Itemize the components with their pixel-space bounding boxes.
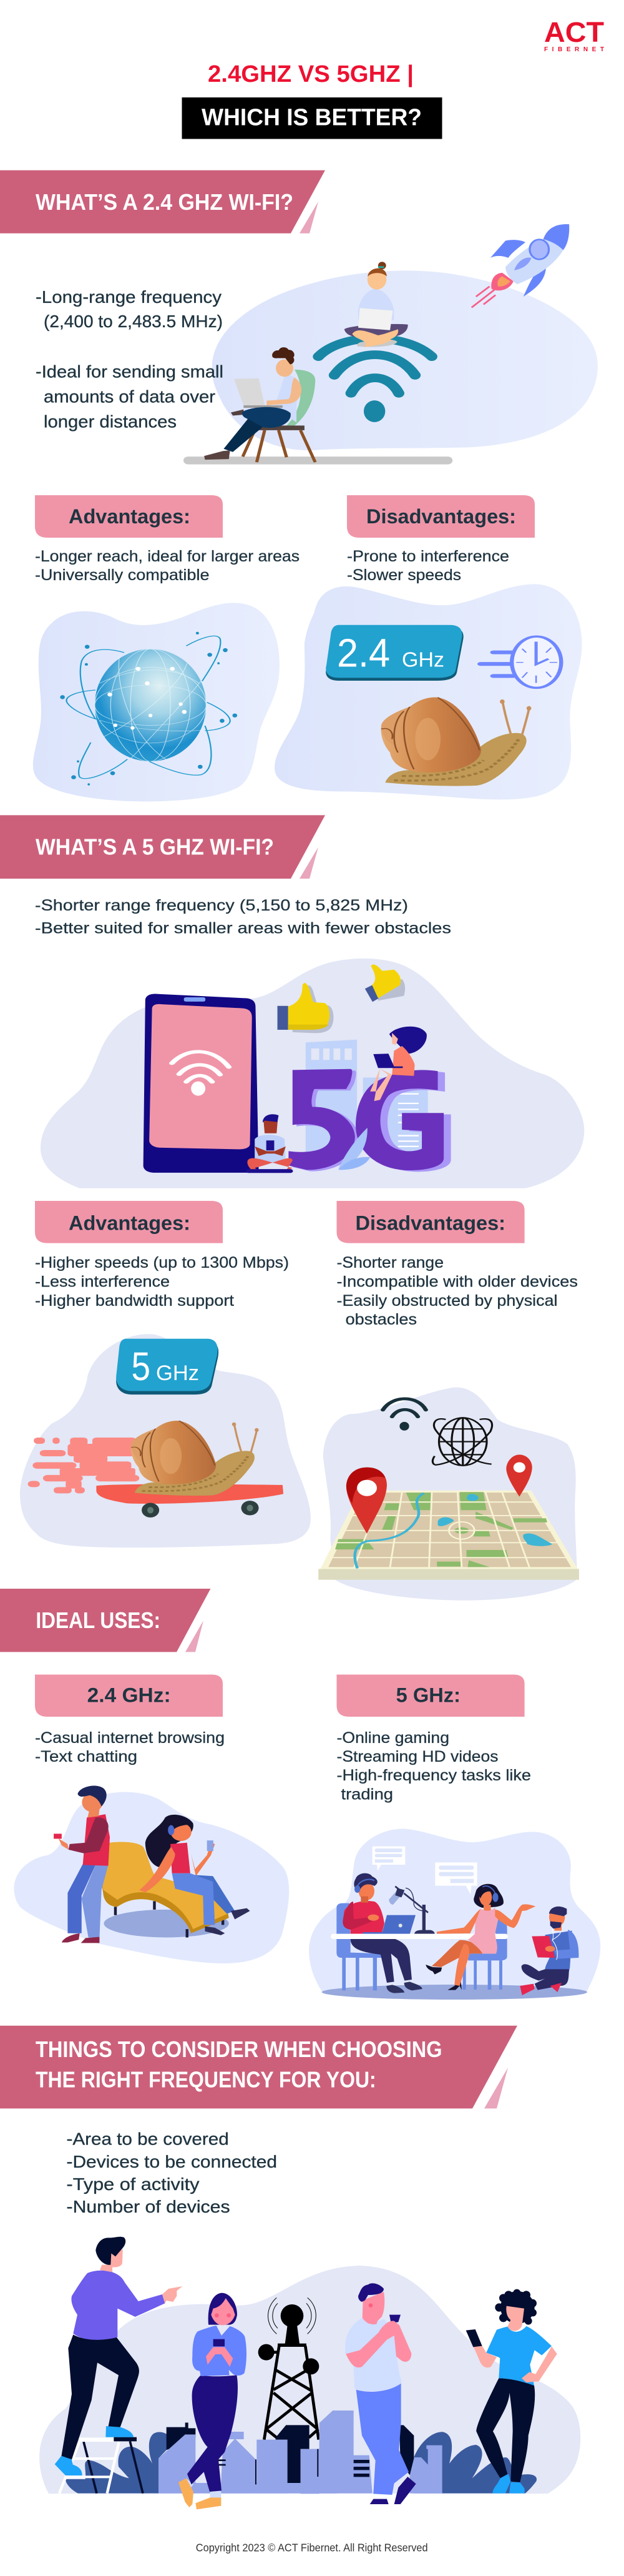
text block: 2.4 GHz description: longer distances xyxy=(44,412,177,431)
icon: location pin large xyxy=(346,1468,387,1534)
person left with headphones xyxy=(343,1873,422,1993)
icon: laptop xyxy=(363,1915,416,1934)
leaf xyxy=(338,1128,370,1170)
chair left xyxy=(336,1903,383,1990)
illustration: podcast table with three people xyxy=(309,1828,600,2000)
plants left xyxy=(66,2432,168,2494)
text block: disadvantages list: -Shorter range xyxy=(337,1254,444,1271)
text block: advantages list: -Higher bandwidth support xyxy=(35,1292,234,1310)
text block: 5 GHz uses list: -High-frequency tasks like xyxy=(337,1767,531,1784)
logo: ACT Fibernet: ACT xyxy=(544,16,604,48)
icon: globe outline xyxy=(432,1418,492,1466)
text block: disadvantages list: -Easily obstructed by physical xyxy=(337,1292,558,1310)
buildings xyxy=(306,1040,428,1156)
man pointing xyxy=(55,2237,182,2475)
text block: advantages list: -Less interference xyxy=(35,1273,170,1290)
illustration: couple with phones on chair xyxy=(14,1786,289,1963)
footer: copyright: Copyright 2023 © ACT Fibernet. All Right Reserved xyxy=(196,2542,428,2554)
illustration: people using wifi with rocket xyxy=(183,224,598,465)
heading banner: things to consider: THE RIGHT FREQUENCY FOR YOU: xyxy=(36,2066,376,2092)
illustration: people with phones around a tower xyxy=(39,2237,580,2509)
man with phone xyxy=(345,2283,416,2504)
text block: 2.4 GHz description xyxy=(36,287,223,431)
label: 5 GHz xyxy=(337,1675,525,1717)
panel: what's a 2.4 GHz Wi-Fi xyxy=(0,170,598,465)
icon: rocket xyxy=(472,224,569,307)
panel: 2.4 GHz disadvantages xyxy=(275,495,582,799)
table xyxy=(331,1934,508,1939)
panel: 5 GHz disadvantages xyxy=(318,1201,579,1601)
text block: 5 GHz description xyxy=(35,897,451,937)
label: Advantages: Advantages: xyxy=(69,505,190,528)
text block: advantages list: -Higher speeds (up to 1300 Mbps) xyxy=(35,1254,289,1271)
chair right xyxy=(463,1919,507,1990)
text block: 5 GHz uses list xyxy=(337,1729,531,1804)
person sitting on wifi xyxy=(344,262,408,347)
text block: 2.4 GHz uses list: -Casual internet browsing xyxy=(35,1729,225,1747)
woman with curly hair xyxy=(466,2289,557,2494)
illustration: snail on skateboard xyxy=(20,1334,311,1547)
illustration: 5G phone xyxy=(41,959,584,1188)
text block: 2.4 GHz uses list: -Text chatting xyxy=(35,1748,137,1765)
illustration: snail with 2.4 GHz badge and clock: GHz xyxy=(402,648,444,671)
illustration: snail with 2.4 GHz badge and clock: 2.4 xyxy=(337,631,390,676)
heading banner: things to consider xyxy=(0,2026,517,2108)
label: Advantages xyxy=(35,495,223,538)
man sitting xyxy=(246,1114,293,1173)
speech bubbles xyxy=(373,1847,477,1894)
woman in pink dress xyxy=(426,1884,535,1990)
label: Disadvantages xyxy=(347,495,535,538)
skyline right xyxy=(312,2411,442,2494)
panel: what's a 5 GHz Wi-Fi xyxy=(0,815,584,1188)
heading banner: 2.4 GHz xyxy=(0,170,325,234)
label: 5 GHz: 5 GHz: xyxy=(396,1684,461,1706)
panel: things to consider xyxy=(0,2026,580,2509)
logo: ACT Fibernet: FIBERNET xyxy=(544,46,604,53)
text block: advantages list: -Longer reach, ideal for larger areas xyxy=(35,548,300,565)
heading banner: ideal uses: IDEAL USES: xyxy=(36,1607,160,1633)
icon: wifi xyxy=(318,338,432,422)
text block: 2.4 GHz description: -Ideal for sending small xyxy=(36,362,223,381)
text block: considerations list: -Devices to be connected xyxy=(66,2152,277,2171)
label: Disadvantages: Disadvantages: xyxy=(366,505,516,528)
speed splash xyxy=(28,1438,139,1493)
ladder xyxy=(59,2437,143,2494)
heading banner: 5 GHz: WHAT’S A 5 GHZ WI-FI? xyxy=(36,834,274,859)
man standing xyxy=(54,1786,110,1943)
text block: 5 GHz uses list: -Online gaming xyxy=(337,1729,449,1747)
text block: 5 GHz description: -Shorter range frequency (5,150 to 5,825 MHz) xyxy=(35,897,408,914)
icon: thumbs up tilted xyxy=(365,965,405,1002)
icon: wifi dark xyxy=(383,1399,426,1431)
heading banner: 5 GHz xyxy=(0,815,325,879)
icon: microphone xyxy=(389,1887,435,1934)
map xyxy=(318,1491,579,1580)
text block: 2.4 GHz description: (2,400 to 2,483.5 MHz) xyxy=(44,312,223,331)
text block: considerations list: -Number of devices xyxy=(66,2197,230,2216)
illustration: snail on skateboard: 5 xyxy=(131,1344,150,1389)
illustration: map with pins xyxy=(318,1388,579,1601)
label: 2.4 GHz xyxy=(35,1675,223,1717)
plants right xyxy=(414,2432,537,2494)
title: 2.4GHZ VS 5GHZ | xyxy=(208,61,414,87)
title xyxy=(182,61,442,139)
text block: disadvantages list: -Slower speeds xyxy=(347,566,461,584)
man sitting with tablet xyxy=(520,1907,578,1995)
city skyline xyxy=(158,2422,337,2494)
text block: considerations list xyxy=(66,2129,277,2216)
text block: 5 GHz description: -Better suited for smaller areas with fewer obstacles xyxy=(35,919,451,937)
text block: disadvantages list xyxy=(337,1254,578,1328)
illustration: snail on skateboard: GHz xyxy=(156,1361,199,1385)
text block: advantages list: -Universally compatible xyxy=(35,566,210,584)
icon: location pin small xyxy=(506,1454,532,1497)
label: Advantages: Advantages: xyxy=(69,1212,190,1234)
skyline foreground xyxy=(256,2411,337,2494)
icon: clock xyxy=(480,636,561,688)
title: WHICH IS BETTER? xyxy=(202,105,422,131)
panel: ideal uses xyxy=(0,1589,600,2000)
text block: advantages list xyxy=(35,548,300,584)
label: 2.4 GHz: 2.4 GHz: xyxy=(87,1684,171,1706)
text block: 5 GHz uses list: -Streaming HD videos xyxy=(337,1748,498,1765)
label: Disadvantages: Disadvantages: xyxy=(356,1212,505,1234)
badge shape xyxy=(326,628,464,681)
illustration: snail with 2.4 GHz badge and clock xyxy=(275,584,582,799)
illustration: globe xyxy=(33,603,280,802)
icon: thumbs up xyxy=(278,983,333,1033)
text block: 5 GHz uses list: trading xyxy=(341,1786,393,1804)
text block: 2.4 GHz uses list xyxy=(35,1729,225,1765)
column: 5 GHz uses xyxy=(309,1675,600,2000)
text block: 2.4 GHz description: amounts of data over xyxy=(44,387,215,407)
woman with phone xyxy=(178,2293,246,2509)
panel: 2.4 GHz advantages xyxy=(33,495,300,802)
heading banner: ideal uses xyxy=(0,1589,210,1652)
heading banner: things to consider: THINGS TO CONSIDER WHEN CHOOSING xyxy=(36,2036,442,2062)
text block: disadvantages list: -Prone to interference xyxy=(347,548,509,565)
column: 2.4 GHz uses xyxy=(14,1675,289,1963)
text block: considerations list: -Type of activity xyxy=(66,2174,200,2194)
panel: 5 GHz advantages xyxy=(20,1201,311,1547)
text block: disadvantages list xyxy=(347,548,509,584)
person on chair with laptop xyxy=(204,347,315,462)
5G letters xyxy=(288,1069,451,1172)
skateboard xyxy=(96,1484,283,1517)
icon: signal tower xyxy=(258,2297,319,2440)
text block: disadvantages list: -Incompatible with older devices xyxy=(337,1273,578,1290)
woman with laptop xyxy=(370,1027,427,1101)
woman sitting xyxy=(139,1815,250,1935)
badge shape xyxy=(116,1342,218,1394)
label: Disadvantages xyxy=(337,1201,525,1243)
text block: considerations list: -Area to be covered xyxy=(66,2129,229,2149)
heading banner: 2.4 GHz: WHAT’S A 2.4 GHZ WI-FI? xyxy=(36,189,293,215)
text block: 2.4 GHz description: -Long-range frequency xyxy=(36,287,222,307)
label: Advantages xyxy=(35,1201,223,1243)
icon: phone with wifi xyxy=(144,994,259,1173)
text block: advantages list xyxy=(35,1254,289,1310)
text block: disadvantages list: obstacles xyxy=(346,1311,417,1328)
chair xyxy=(102,1842,229,1937)
